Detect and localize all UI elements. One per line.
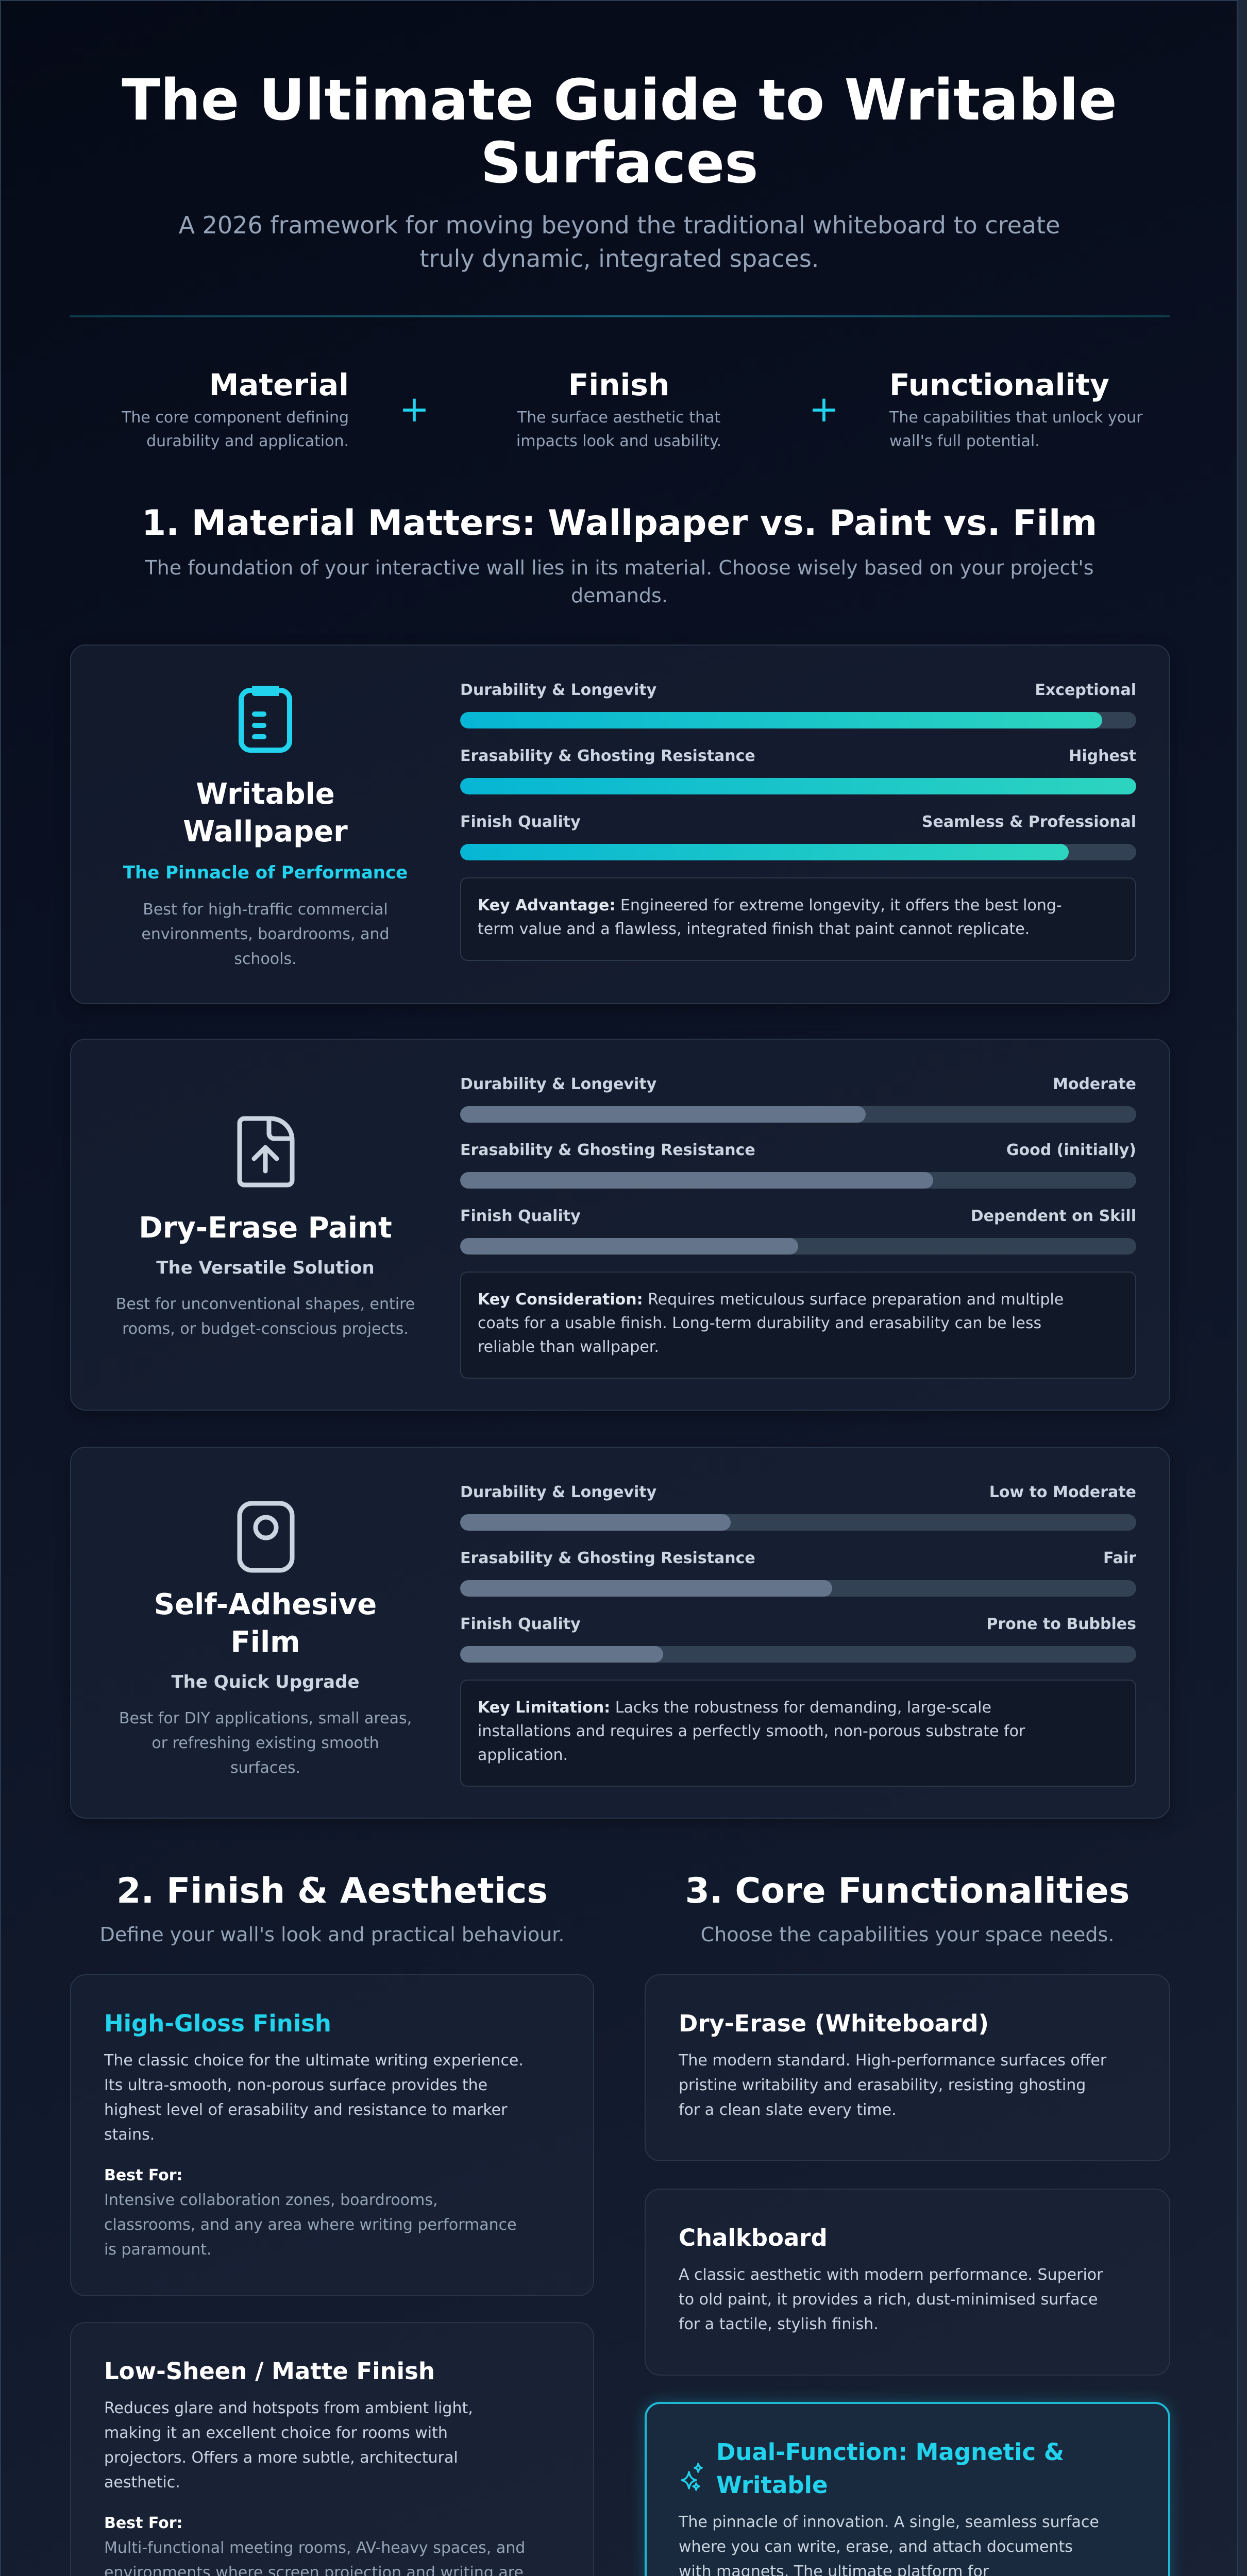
pillar: finish: impacts look and usability. <box>516 432 721 450</box>
metric: erasability <box>460 1548 1136 1569</box>
pillar: material: Material <box>209 367 349 402</box>
title: Wallpaper <box>183 815 348 849</box>
subtitle: A 2026 framework for moving beyond the traditional whiteboard to create <box>179 211 1060 239</box>
description <box>116 1295 415 1338</box>
section 1 subtitle <box>145 556 1094 607</box>
icon: wallpaper <box>239 686 292 753</box>
section 3 subtitle: Choose the capabilities your space needs. <box>701 1923 1114 1946</box>
title: Dual-Function: Magnetic & <box>716 2438 1064 2466</box>
description: Best for unconventional shapes, entire <box>116 1295 415 1313</box>
metric: durability <box>460 1075 1136 1093</box>
panel: high-gloss finish: classrooms, and any area where writing performance <box>104 2216 517 2234</box>
panel: low-sheen finish: Low-Sheen / Matte Finish <box>104 2358 435 2385</box>
metric: durability: Durability & Longevity <box>460 1483 656 1501</box>
panel: low-sheen finish: Reduces glare and hotspots from ambient light, <box>104 2399 473 2417</box>
panel: high-gloss finish: highest level of erasability and resistance to marker <box>104 2101 507 2119</box>
metric: erasability: Highest <box>1069 747 1136 765</box>
pillar: finish: Finish <box>568 367 669 402</box>
description: Best for high-traffic commercial <box>143 901 388 919</box>
section 2 heading: 2. Finish & Aesthetics <box>116 1871 548 1911</box>
icon: film <box>237 1501 295 1572</box>
pillar: material: durability and application. <box>146 432 349 450</box>
panel: low-sheen finish <box>70 2322 594 2576</box>
panel: dry-erase whiteboard: pristine writability and erasability, resisting ghosting <box>679 2076 1086 2094</box>
description: schools. <box>234 950 297 968</box>
description: Best for DIY applications, small areas, <box>119 1709 412 1727</box>
callout: key consideration: coats for a usable finish. Long-term durability and erasability can be less <box>478 1314 1041 1332</box>
callout: key consideration: reliable than wallpaper. <box>478 1338 659 1356</box>
panel: high-gloss finish: Intensive collaboration zones, boardrooms, <box>104 2191 438 2209</box>
icon: sparkles <box>681 2461 703 2494</box>
tagline: The Quick Upgrade <box>171 1672 360 1692</box>
pillar: material: The core component defining <box>122 409 349 427</box>
pillar: functionality: wall's full potential. <box>889 432 1040 450</box>
section 1 subtitle: The foundation of your interactive wall lies in its material. Choose wisely based on your project's <box>145 556 1094 579</box>
panel: dry-erase whiteboard: The modern standard. High-performance surfaces offer <box>679 2052 1106 2070</box>
metric: durability: Moderate <box>1053 1075 1136 1093</box>
description: where you can write, erase, and attach documents <box>679 2538 1073 2556</box>
metric: finish: Finish Quality <box>460 1207 581 1225</box>
metric: finish: Finish Quality <box>460 813 581 831</box>
icon: plus: + <box>399 388 429 430</box>
callout: key consideration: Key Consideration: Requires meticulous surface preparation and multiple <box>478 1291 1064 1309</box>
subtitle: truly dynamic, integrated spaces. <box>420 245 819 273</box>
metric: finish <box>460 813 1136 831</box>
panel: low-sheen finish: Multi-functional meeting rooms, AV-heavy spaces, and <box>104 2539 525 2557</box>
panel: self-adhesive film <box>70 1447 1170 1819</box>
pillar: finish: The surface aesthetic that <box>517 409 720 427</box>
icon: document upload <box>237 1116 295 1187</box>
pillar: functionality <box>889 367 1143 450</box>
description: environments, boardrooms, and <box>141 925 390 943</box>
description: The pinnacle of innovation. A single, seamless surface <box>679 2513 1099 2531</box>
panel: chalkboard: to old paint, it provides a rich, dust-minimised surface <box>679 2291 1098 2309</box>
panel: high-gloss finish: stains. <box>104 2126 155 2144</box>
section 1 subtitle: demands. <box>571 584 668 607</box>
panel: low-sheen finish: making it an excellent choice for rooms with <box>104 2424 448 2442</box>
description <box>119 1709 412 1777</box>
panel: dry-erase whiteboard <box>645 1974 1170 2161</box>
section 2 subtitle: Define your wall's look and practical behaviour. <box>100 1923 564 1946</box>
panel: low-sheen finish: Best For: <box>104 2514 183 2532</box>
callout: key advantage <box>460 877 1136 961</box>
pillar: functionality: Functionality <box>889 367 1109 402</box>
panel: dual-function <box>645 2402 1170 2576</box>
panel: dry-erase whiteboard: for a clean slate every time. <box>679 2101 897 2119</box>
metric: finish: Finish Quality <box>460 1615 581 1633</box>
metric: erasability: Fair <box>1103 1549 1136 1567</box>
tagline: The Versatile Solution <box>156 1258 375 1278</box>
callout: key limitation: Key Limitation: Lacks the robustness for demanding, large-scale <box>478 1699 991 1717</box>
section 3 heading: 3. Core Functionalities <box>685 1871 1130 1911</box>
panel: chalkboard: for a tactile, stylish finish. <box>679 2315 879 2333</box>
panel: writable wallpaper <box>70 645 1170 1004</box>
callout: key advantage: term value and a flawless, integrated finish that paint cannot replicate. <box>478 920 1030 938</box>
tagline: The Pinnacle of Performance <box>123 862 408 883</box>
metric: erasability: Erasability & Ghosting Resistance <box>460 1141 755 1159</box>
metric: durability: Low to Moderate <box>989 1483 1136 1501</box>
title: Film <box>231 1625 300 1659</box>
metric: durability: Durability & Longevity <box>460 1075 656 1093</box>
description <box>141 901 390 968</box>
metric: durability: Durability & Longevity <box>460 681 656 699</box>
panel: chalkboard: Chalkboard <box>679 2224 828 2251</box>
metric: durability <box>460 681 1136 699</box>
metric: erasability: Good (initially) <box>1006 1141 1136 1159</box>
title <box>716 2436 1142 2502</box>
title <box>122 67 1117 196</box>
panel: high-gloss finish: is paramount. <box>104 2241 212 2259</box>
callout: key limitation: application. <box>478 1746 568 1764</box>
metric: finish <box>460 1614 1136 1635</box>
callout: key limitation: installations and requires a perfectly smooth, non-porous substrate for <box>478 1722 1025 1740</box>
panel: high-gloss finish: The classic choice for the ultimate writing experience. <box>104 2052 524 2070</box>
title: Writable <box>716 2471 828 2499</box>
metric: erasability <box>460 1141 1136 1159</box>
callout: key consideration <box>460 1272 1136 1379</box>
title <box>183 777 348 849</box>
section 1 heading: 1. Material Matters: Wallpaper vs. Paint vs. Film <box>142 503 1097 544</box>
metric: durability <box>460 1483 1136 1501</box>
panel: high-gloss finish <box>70 1974 594 2296</box>
panel: low-sheen finish: aesthetic. <box>104 2473 180 2492</box>
metric: durability: Exceptional <box>1035 681 1136 699</box>
callout: key advantage: Key Advantage: Engineered for extreme longevity, it offers the best long- <box>478 896 1062 914</box>
subtitle <box>179 211 1060 273</box>
title <box>154 1588 377 1659</box>
panel: low-sheen finish: projectors. Offers a more subtle, architectural <box>104 2449 458 2467</box>
callout: key limitation <box>460 1680 1136 1787</box>
pillar: material <box>122 367 349 450</box>
metric: erasability: Erasability & Ghosting Resistance <box>460 747 755 765</box>
pillar: functionality: The capabilities that unlock your <box>889 409 1142 427</box>
panel: chalkboard <box>645 2189 1170 2376</box>
panel: dry-erase paint <box>70 1039 1170 1411</box>
panel: dry-erase whiteboard: Dry-Erase (Whiteboard) <box>679 2010 989 2037</box>
metric: finish: Prone to Bubbles <box>986 1615 1136 1633</box>
panel: high-gloss finish: Its ultra-smooth, non-porous surface provides the <box>104 2076 487 2094</box>
description <box>679 2510 1142 2576</box>
icon: plus: + <box>809 388 839 430</box>
metric: finish: Seamless & Professional <box>922 813 1136 831</box>
title: Surfaces <box>480 130 759 196</box>
metric: finish: Dependent on Skill <box>971 1207 1136 1225</box>
panel: high-gloss finish: Best For: <box>104 2166 183 2184</box>
title: Dry-Erase Paint <box>139 1211 392 1245</box>
pillar: finish <box>516 367 721 450</box>
description: rooms, or budget-conscious projects. <box>122 1320 409 1338</box>
metric: erasability: Erasability & Ghosting Resistance <box>460 1549 755 1567</box>
title: The Ultimate Guide to Writable <box>122 67 1117 133</box>
title: Self-Adhesive <box>154 1588 377 1621</box>
metric: erasability <box>460 747 1136 765</box>
metric: finish <box>460 1207 1136 1225</box>
title: Writable <box>196 777 335 811</box>
description: surfaces. <box>230 1759 300 1777</box>
panel: chalkboard: A classic aesthetic with modern performance. Superior <box>679 2266 1103 2284</box>
description: or refreshing existing smooth <box>151 1734 379 1752</box>
panel: high-gloss finish: High-Gloss Finish <box>104 2010 331 2037</box>
